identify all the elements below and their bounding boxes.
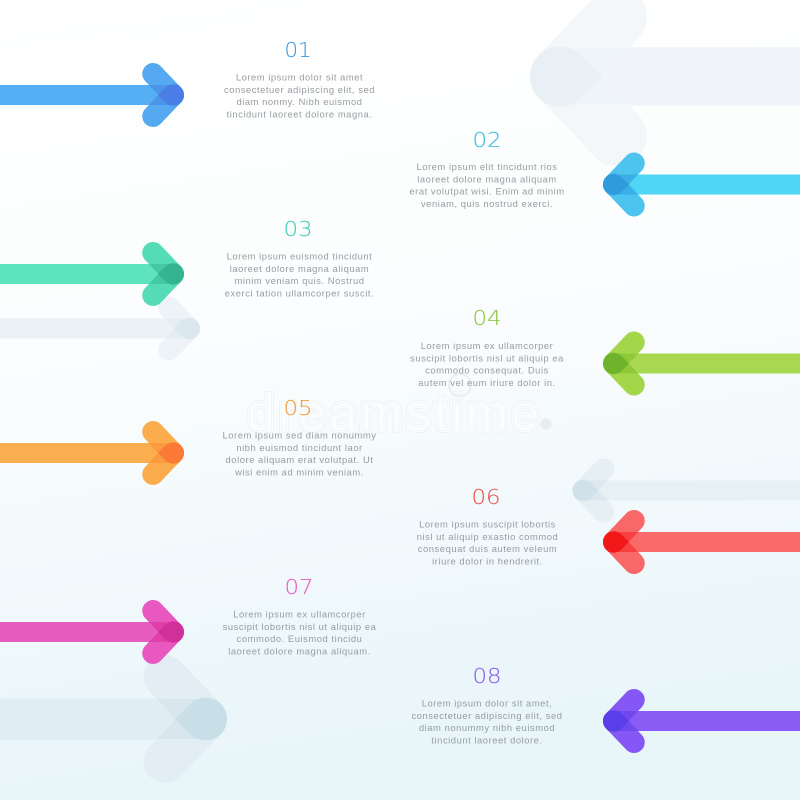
step 07 text: 07 (284, 575, 314, 599)
arrow 03 teal (0, 253, 184, 295)
step 03 text: exerci tation ullamcorper suscit. (225, 287, 374, 298)
step 05 text: wisi enim ad minim veniam. (234, 466, 364, 477)
step 07 text: laoreet dolore magna aliquam. (228, 645, 371, 656)
arrow 08 purple (603, 700, 800, 742)
step 05 text: dolore aliquam erat volutpat. Ut (226, 454, 373, 465)
step 07 text: commodo. Euismod tincidu (237, 633, 362, 644)
arrow 01 blue (0, 74, 184, 116)
step 05 text: 05 (284, 396, 312, 420)
step 08 text: Lorem ipsum dolor sit amet, (422, 698, 552, 708)
arrow 02 cyan (603, 163, 800, 206)
faint large arrow top right (530, 17, 800, 136)
step 07 text: Lorem ipsum ex ullamcorper (233, 608, 366, 620)
step 07 text (223, 575, 377, 656)
step 01 text: tincidunt laoreet dolore magna. (227, 108, 372, 119)
step 06 text: nisl ut aliquip exastio commod (417, 531, 558, 542)
faint small arrow left (0, 307, 200, 350)
step 08 text (411, 664, 563, 745)
step 04 text: autem vel eum iriure dolor in. (418, 377, 556, 388)
step 03 text: minim veniam quis. Nostrud (235, 275, 364, 286)
step 07 text: suscipit lobortis nisl ut aliquip ea (223, 621, 377, 632)
step 06 text (417, 485, 558, 566)
faint large arrow bottom left (0, 676, 227, 762)
step 04 text: commodo consequat. Duis (425, 365, 549, 376)
step 03 text: Lorem ipsum euismod tincidunt (227, 250, 372, 262)
step 05 text: Lorem ipsum sed diam nonummy (222, 430, 376, 440)
step 04 text: 04 (472, 306, 502, 330)
watermark: dreamstime (247, 385, 539, 441)
step 01 text (224, 38, 375, 119)
step 03 text: 03 (284, 217, 312, 241)
step 01 text: 01 (284, 38, 312, 62)
arrow 04 green (603, 342, 800, 385)
step 06 text: consequat duis autem veleum (418, 543, 557, 554)
step 06 text: Lorem ipsum suscipit lobortis (419, 518, 556, 530)
step 05 text: nibh euismod tincidunt laor (236, 442, 363, 453)
step 02 text: erat volutpat wisi. Enim ad minim (409, 186, 565, 197)
faint small arrow right (572, 469, 800, 512)
step 04 text: suscipit lobortis nisl ut aliquip ea (410, 352, 564, 363)
step 06 text: iriure dolor in hendrerit. (432, 555, 543, 566)
step 02 text: veniam, quis nostrud exerci. (421, 198, 553, 209)
step 02 text: laoreet dolore magna aliquam (417, 173, 557, 184)
step 04 text: Lorem ipsum ex ullamcorper (421, 340, 553, 351)
step 04 text (410, 306, 564, 388)
step 05 text (222, 396, 376, 477)
step 08 text: 08 (472, 664, 502, 688)
step 06 text: 06 (472, 485, 500, 509)
step 08 text: consectetuer adipiscing elit, sed (411, 710, 563, 721)
watermark: dreamstime (247, 385, 539, 441)
arrow 06 red (603, 521, 800, 563)
step 03 text (225, 217, 374, 298)
step 01 text: Lorem ipsum dolor sit amet (236, 72, 363, 82)
arrow 07 pink (0, 611, 184, 653)
watermark: dreamstime (247, 385, 539, 441)
step 01 text: consectetuer adipiscing elit, sed (224, 84, 375, 95)
step 08 text: diam nonummy nibh euismod (419, 722, 555, 733)
step 08 text: tincidunt laoreet dolore. (431, 734, 543, 745)
step 03 text: laoreet dolore magna aliquam (230, 263, 369, 274)
step 02 text: 02 (472, 128, 502, 152)
step 02 text: Lorem ipsum elit tincidunt rios (416, 161, 558, 172)
step 01 text: diam nonmy. Nibh euismod (236, 96, 363, 107)
arrow 05 orange (0, 432, 184, 474)
step 02 text (409, 128, 565, 209)
